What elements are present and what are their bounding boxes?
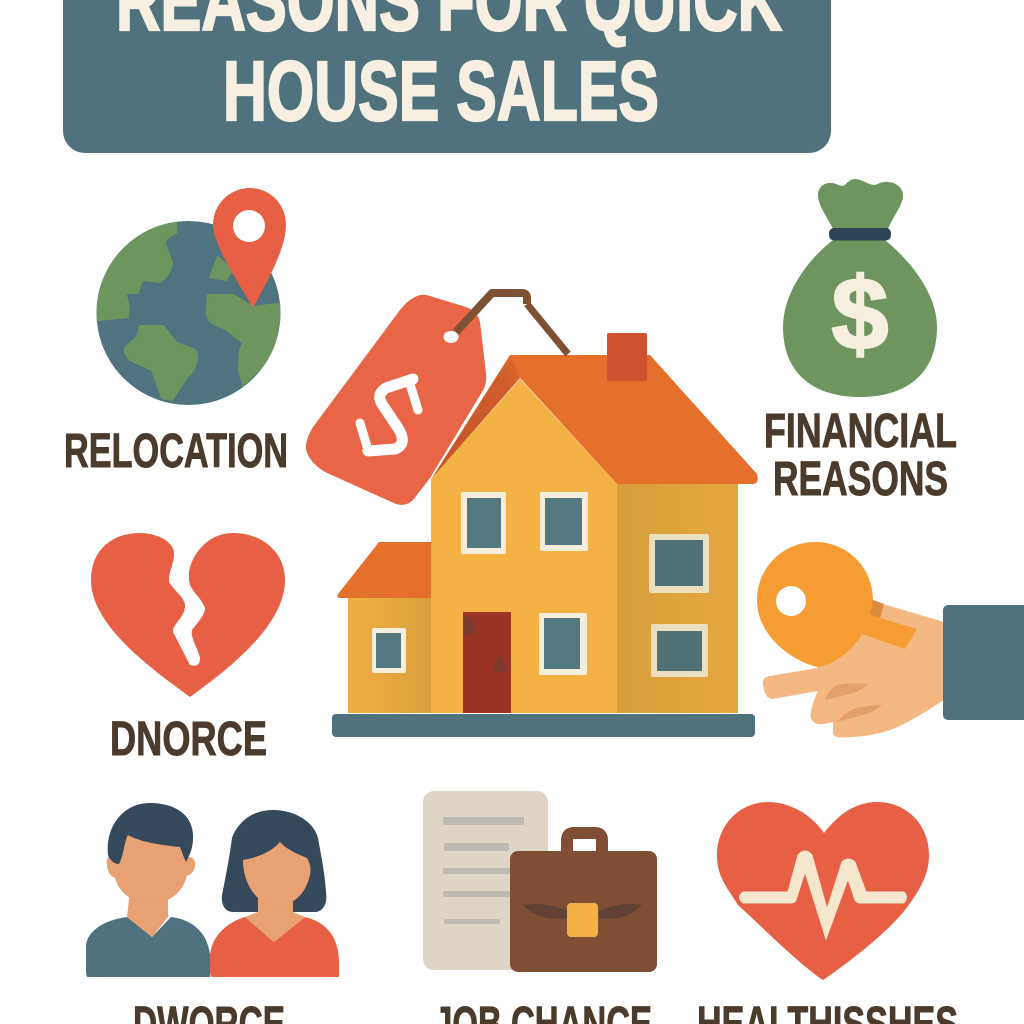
- document: [423, 791, 548, 970]
- icon: document and briefcase: [423, 791, 657, 972]
- icon: globe with location pin: [80, 188, 286, 405]
- side wall: [617, 484, 738, 713]
- label: financial reasons: [764, 405, 957, 506]
- briefcase: [510, 833, 657, 972]
- label: relocation: RELOCATION: [64, 425, 288, 478]
- title banner: HOUSE SALES: [223, 44, 659, 138]
- icon: heart with pulse: [717, 802, 929, 980]
- base slab: [332, 714, 755, 737]
- string back: [527, 304, 568, 354]
- door: [463, 612, 511, 713]
- hand: [763, 604, 944, 738]
- label: financial reasons: REASONS: [773, 453, 948, 506]
- roof: [432, 333, 758, 484]
- title banner: [63, 0, 831, 153]
- icon: price tag: [306, 293, 568, 505]
- front wall: [431, 379, 617, 713]
- icon: couple: [86, 803, 339, 977]
- annex: [337, 542, 431, 713]
- woman: [210, 810, 339, 977]
- label: financial reasons: FINANCIAL: [764, 405, 957, 458]
- cuff: [943, 605, 1024, 720]
- illustration: house: [332, 333, 758, 737]
- key: [757, 542, 917, 667]
- dollar mark: [360, 379, 418, 451]
- icon: location pin: [213, 188, 286, 308]
- icon: hand holding key: [757, 542, 1024, 738]
- icon: money bag: $: [832, 257, 888, 371]
- string front: [456, 293, 527, 332]
- label: dnorce: DNORCE: [110, 713, 267, 766]
- icon: money bag: [783, 179, 937, 397]
- creases: [825, 683, 868, 700]
- windows: [461, 492, 709, 677]
- man: [86, 803, 210, 977]
- icon: broken heart: [91, 533, 285, 697]
